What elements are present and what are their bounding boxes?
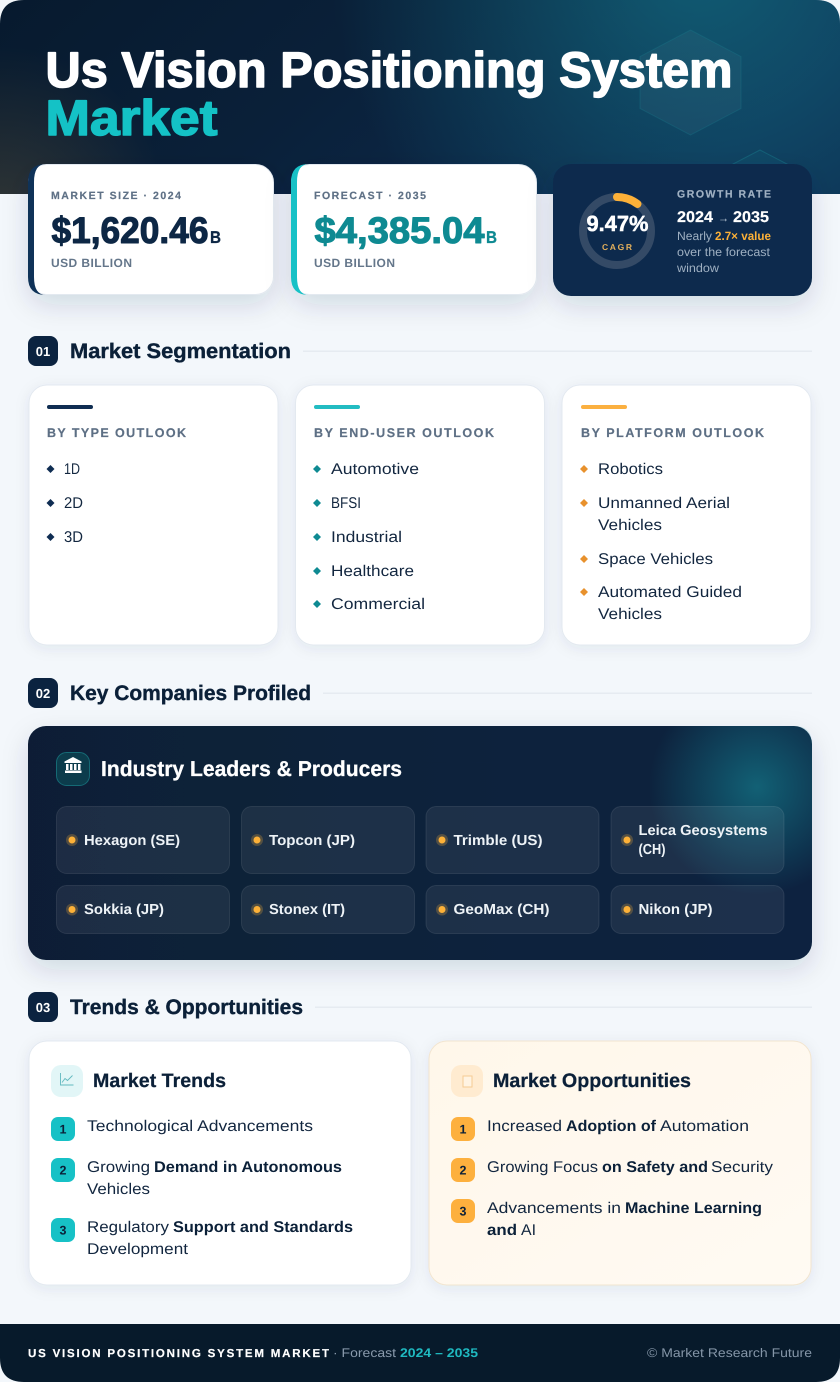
section heading 02: 02 bbox=[36, 686, 50, 701]
opportunity 3: Advancements in bbox=[487, 1200, 621, 1217]
company chip: Stonex: Stonex (IT) bbox=[269, 902, 345, 918]
company chip: Leica Geosystems bbox=[611, 806, 784, 874]
opportunity 3 bbox=[451, 1199, 762, 1239]
section heading 01: Market Segmentation bbox=[70, 340, 291, 363]
CAGR donut: CAGR bbox=[602, 242, 632, 252]
opportunity 3: AI bbox=[521, 1222, 536, 1239]
panel: by type outlook bbox=[29, 385, 278, 645]
title: Market bbox=[46, 90, 218, 146]
company chip: Nikon: Nikon (JP) bbox=[638, 902, 713, 918]
company chip: Sokkia bbox=[56, 886, 230, 934]
panel: market trends bbox=[29, 1041, 411, 1285]
panel: by end-user outlook: BY END-USER OUTLOOK bbox=[314, 426, 494, 440]
trend 2: 2 bbox=[60, 1164, 67, 1178]
company chip: Sokkia: Sokkia (JP) bbox=[84, 902, 164, 918]
panel: market trends: Market Trends bbox=[93, 1070, 226, 1092]
company chip: Leica Geosystems: (CH) bbox=[638, 842, 666, 858]
opportunity 2 bbox=[451, 1158, 773, 1182]
CAGR donut: 9.47% bbox=[586, 211, 648, 236]
section heading 01 bbox=[28, 336, 812, 366]
panel: by type outlook: 3D bbox=[64, 529, 83, 546]
panel: by end-user outlook: Automotive bbox=[331, 461, 419, 478]
trend 3: 3 bbox=[60, 1224, 67, 1238]
trend 2: Demand in Autonomous bbox=[154, 1159, 342, 1176]
growth text: window bbox=[676, 261, 719, 275]
growth text: → bbox=[718, 211, 729, 225]
company chip: Hexagon: Hexagon (SE) bbox=[84, 833, 180, 849]
opportunity 2: Growing Focus bbox=[487, 1159, 598, 1176]
company chip: Hexagon bbox=[56, 806, 230, 874]
panel: by platform outlook: Robotics bbox=[598, 461, 663, 478]
company chip: Trimble: Trimble (US) bbox=[454, 833, 543, 849]
trend 2: Growing bbox=[87, 1159, 150, 1176]
section heading 03: Trends & Opportunities bbox=[70, 996, 303, 1019]
trend 1: Technological Advancements bbox=[87, 1118, 313, 1135]
panel: by end-user outlook: Commercial bbox=[331, 596, 425, 613]
company chip: Trimble bbox=[426, 806, 599, 874]
panel: by type outlook: 1D bbox=[64, 461, 80, 478]
growth rate card bbox=[553, 164, 812, 296]
panel: by end-user outlook: Industrial bbox=[331, 529, 402, 546]
growth text: GROWTH RATE bbox=[677, 188, 771, 200]
trend 2: Vehicles bbox=[87, 1181, 150, 1198]
opportunity 2: on Safety and bbox=[602, 1159, 708, 1176]
opportunity 3: 3 bbox=[460, 1204, 467, 1218]
title: Us Vision Positioning System bbox=[46, 42, 732, 98]
stat card: forecast: USD BILLION bbox=[314, 256, 395, 270]
growth text: 2024 bbox=[677, 209, 713, 226]
stat card: forecast: B bbox=[486, 228, 497, 247]
growth text: 2.7× value bbox=[715, 229, 771, 243]
panel: market opportunities bbox=[429, 1041, 811, 1285]
panel: by platform outlook: Vehicles bbox=[598, 606, 662, 623]
stat card: market size: USD BILLION bbox=[51, 256, 132, 270]
section heading 01: 01 bbox=[36, 344, 50, 359]
footer: US VISION POSITIONING SYSTEM MARKET bbox=[28, 1348, 329, 1360]
opportunity 1: Adoption of bbox=[566, 1118, 657, 1135]
opportunity 3: and bbox=[487, 1222, 517, 1239]
opportunity 1: 1 bbox=[460, 1122, 467, 1136]
icon: opportunity placeholder bbox=[451, 1065, 483, 1097]
trend 2 bbox=[51, 1158, 342, 1198]
title bbox=[46, 42, 732, 146]
company chip: Stonex bbox=[242, 886, 414, 934]
decorative hexagon large bbox=[640, 30, 741, 135]
section heading 02: Key Companies Profiled bbox=[70, 682, 311, 705]
company chip: GeoMax bbox=[426, 886, 599, 934]
growth text: over the forecast bbox=[677, 245, 771, 259]
company chip: Leica Geosystems: Leica Geosystems bbox=[638, 823, 768, 839]
company chip: Nikon bbox=[611, 886, 784, 934]
company chip: Topcon bbox=[242, 806, 414, 874]
stat card: market size: B bbox=[210, 228, 221, 247]
panel: market opportunities: Market Opportunities bbox=[493, 1070, 691, 1092]
opportunity 1 bbox=[451, 1117, 749, 1141]
company chip: Topcon: Topcon (JP) bbox=[269, 833, 355, 849]
panel: by end-user outlook: Healthcare bbox=[331, 563, 414, 580]
section heading 03: 03 bbox=[36, 1000, 50, 1015]
trend 1: 1 bbox=[60, 1122, 67, 1136]
trend 3: Support and Standards bbox=[173, 1219, 353, 1236]
footer: · Forecast bbox=[333, 1346, 397, 1360]
panel: industry leaders bbox=[28, 726, 812, 960]
panel: by type outlook: BY TYPE OUTLOOK bbox=[47, 426, 186, 440]
trend 3 bbox=[51, 1218, 353, 1258]
stat card: market size bbox=[28, 164, 274, 295]
stat card: market size: $1,620.46 bbox=[52, 210, 208, 251]
opportunity 2: Security bbox=[711, 1159, 773, 1176]
stat card: forecast bbox=[291, 164, 536, 295]
trend 1 bbox=[51, 1117, 313, 1141]
stat card: market size: MARKET SIZE · 2024 bbox=[51, 190, 181, 202]
opportunity 2: 2 bbox=[460, 1164, 467, 1178]
CAGR donut bbox=[583, 197, 651, 265]
panel: by platform outlook: BY PLATFORM OUTLOOK bbox=[581, 426, 764, 440]
footer: © Market Research Future bbox=[647, 1346, 812, 1360]
opportunity 1: Automation bbox=[660, 1118, 749, 1135]
panel: by type outlook: 2D bbox=[64, 495, 83, 512]
stat card: forecast: $4,385.04 bbox=[314, 210, 485, 251]
panel heading: Industry Leaders & Producers bbox=[101, 757, 402, 781]
decorative hexagon small bbox=[732, 150, 788, 164]
growth text: 2035 bbox=[733, 209, 769, 226]
panel: by end-user outlook bbox=[296, 385, 544, 645]
footer: 2024 – 2035 bbox=[400, 1346, 478, 1360]
panel: by platform outlook: Unmanned Aerial bbox=[598, 495, 730, 512]
opportunity 1: Increased bbox=[487, 1118, 562, 1135]
section heading 02 bbox=[28, 678, 812, 708]
icon: chart bbox=[51, 1065, 83, 1097]
opportunity 3: Machine Learning bbox=[625, 1200, 762, 1217]
company chip: GeoMax: GeoMax (CH) bbox=[454, 902, 550, 918]
panel: by platform outlook: Space Vehicles bbox=[598, 551, 713, 568]
section heading 03 bbox=[28, 992, 812, 1022]
icon: bank bbox=[56, 752, 90, 786]
panel: by platform outlook: Vehicles bbox=[598, 517, 662, 534]
footer bbox=[0, 1324, 840, 1382]
header banner bbox=[0, 0, 840, 194]
trend 3: Regulatory bbox=[87, 1219, 169, 1236]
panel: by platform outlook bbox=[562, 385, 811, 645]
panel: by platform outlook: Automated Guided bbox=[598, 584, 742, 601]
growth text bbox=[676, 188, 771, 275]
growth text: Nearly bbox=[677, 229, 712, 243]
stat card: forecast: FORECAST · 2035 bbox=[314, 190, 426, 202]
panel: by end-user outlook: BFSI bbox=[331, 495, 361, 512]
trend 3: Development bbox=[87, 1241, 189, 1258]
